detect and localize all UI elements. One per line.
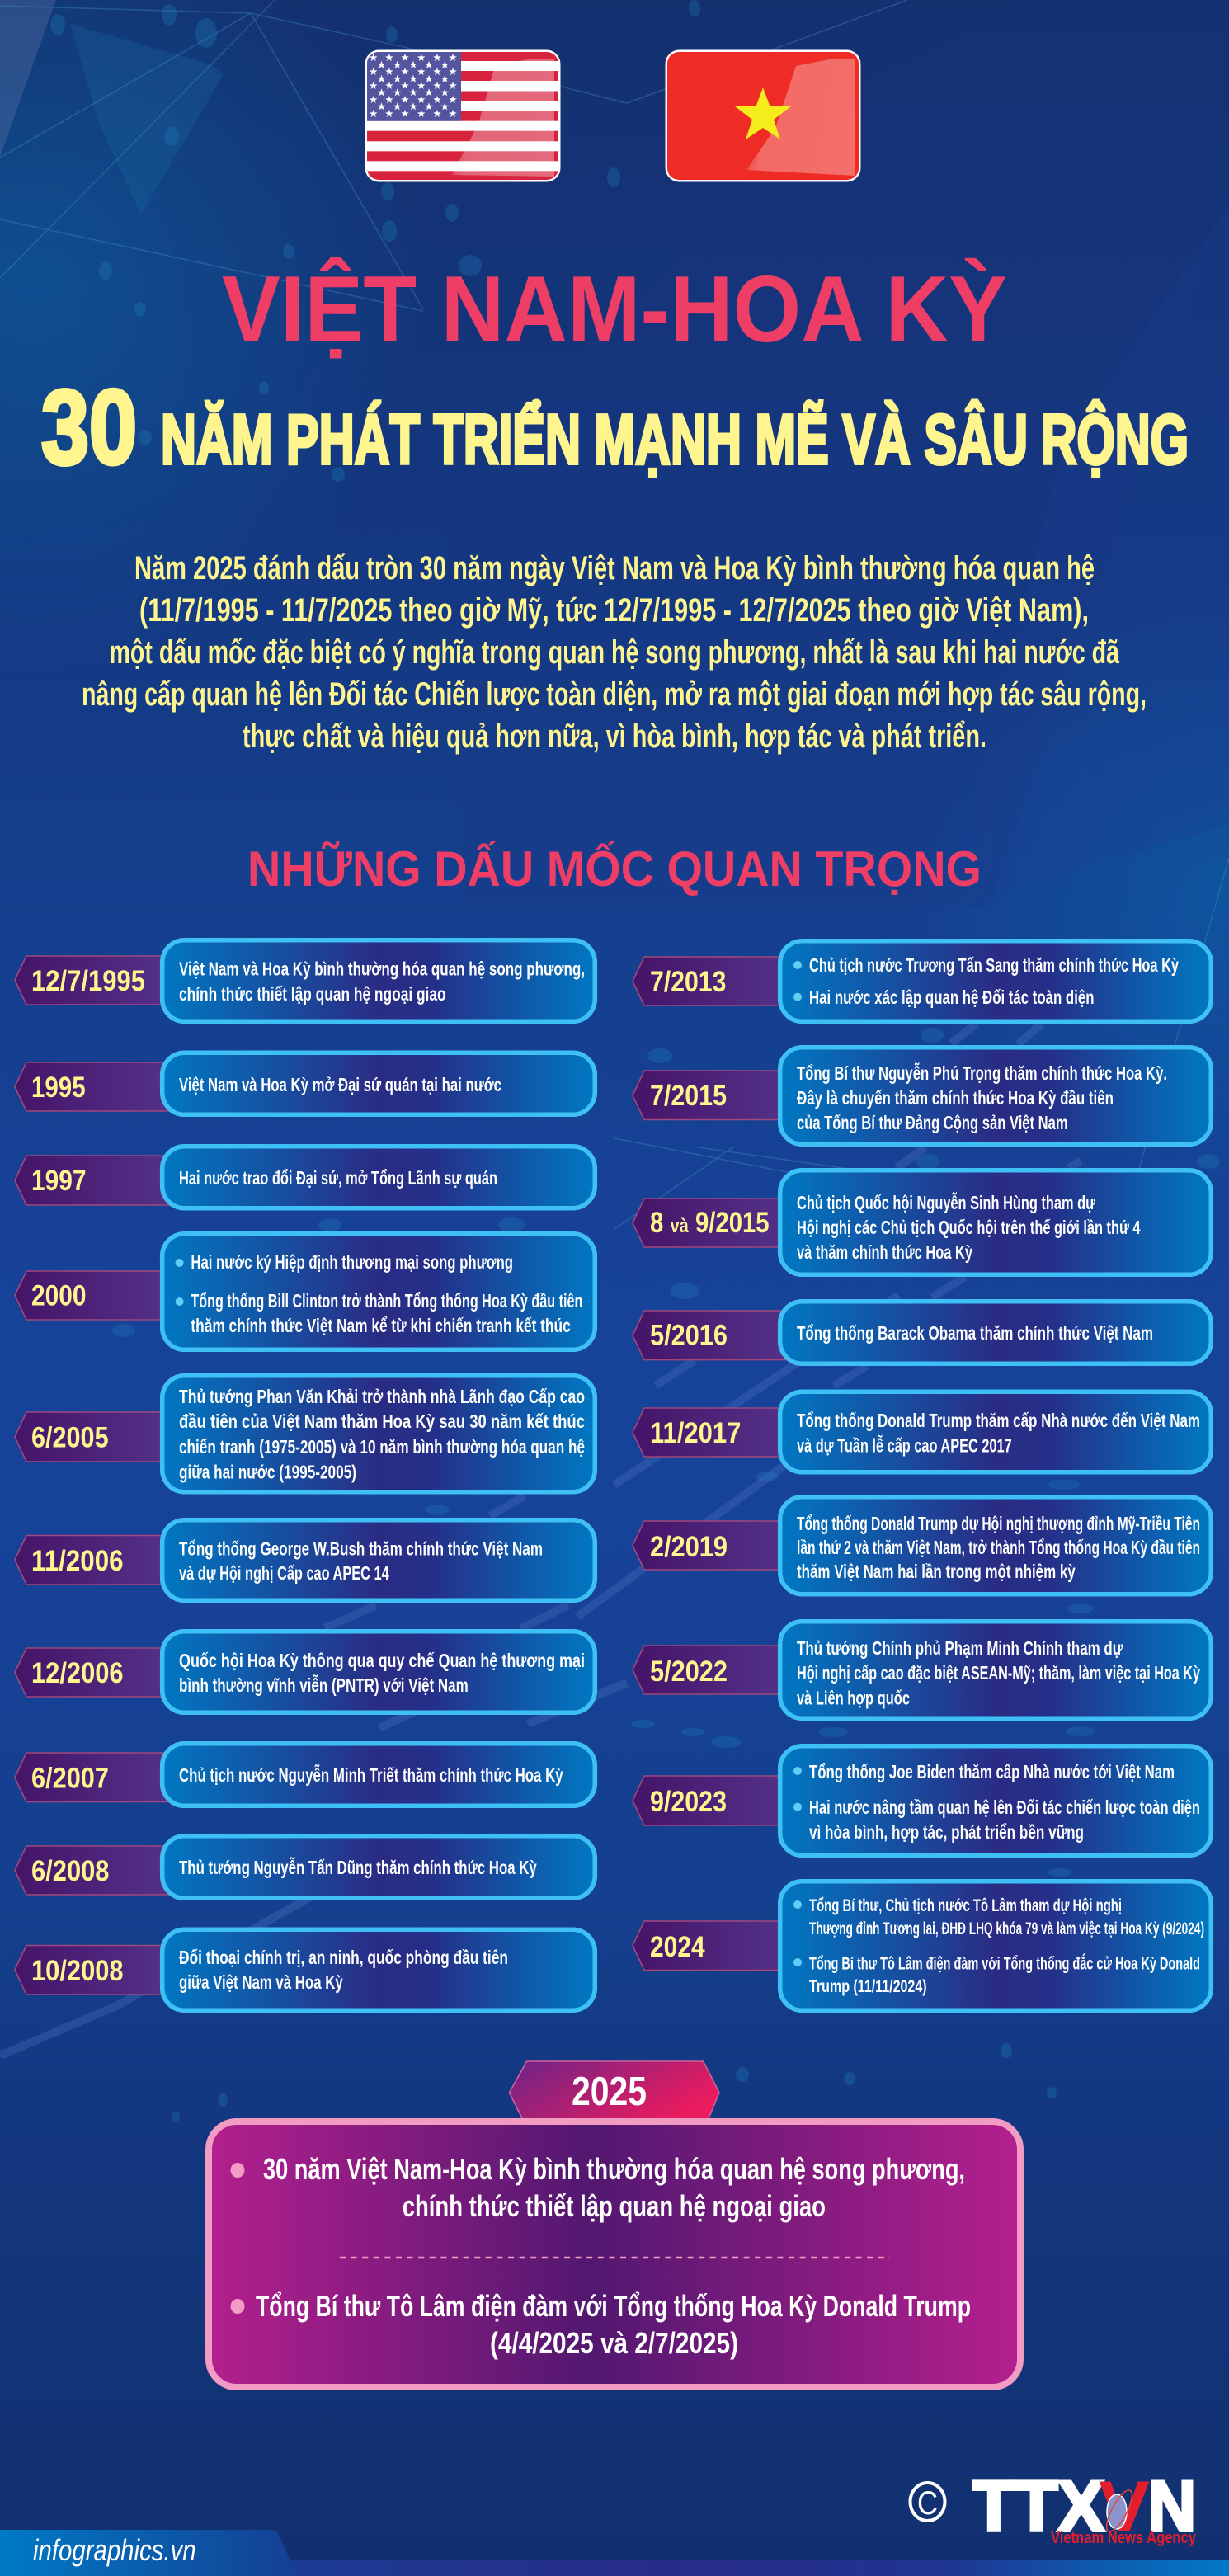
milestone 8 và 9/2015: Chủ tịch Quốc hội Nguyễn Sinh Hùng tham dự <box>797 1191 1095 1213</box>
title: VIỆT NAM-HOA KỲ <box>222 257 1007 362</box>
milestone 10/2008: giữa Việt Nam và Hoa Kỳ <box>179 1971 343 1993</box>
milestone 1997: Hai nước trao đổi Đại sứ, mở Tổng Lãnh sự quán <box>179 1167 497 1189</box>
milestone 6/2007 <box>15 1744 595 1806</box>
logo: TTXVN <box>972 2467 1197 2547</box>
milestone 6/2005: chiến tranh (1975-2005) và 10 năm bình thường hóa quan hệ <box>179 1436 585 1458</box>
milestone 5/2022: và Liên hợp quốc <box>797 1688 910 1709</box>
milestone 11/2017 <box>633 1392 1211 1472</box>
milestone 1997: 1997 <box>31 1165 86 1197</box>
milestone 2/2019 <box>633 1497 1211 1594</box>
milestone 11/2006 <box>15 1520 595 1600</box>
milestone 2000: thăm chính thức Việt Nam kể từ khi chiến tranh kết thúc <box>191 1315 571 1336</box>
milestone 7/2013: Hai nước xác lập quan hệ Đối tác toàn diện <box>809 987 1094 1008</box>
callout box: 30 năm Việt Nam-Hoa Kỳ bình thường hóa quan hệ song phương, <box>263 2152 965 2186</box>
subtitle <box>41 369 1189 487</box>
subtitle: 30 <box>41 369 137 487</box>
logo: TTXVN: TTX <box>972 2467 1104 2546</box>
milestone 10/2008: 10/2008 <box>31 1955 124 1987</box>
milestone 1995: Việt Nam và Hoa Kỳ mở Đại sứ quán tại hai nước <box>179 1074 501 1095</box>
icon: copyright: C <box>917 2485 938 2522</box>
milestone 10/2008: Đối thoại chính trị, an ninh, quốc phòng đầu tiên <box>179 1947 508 1968</box>
badge: 2025 <box>510 2061 719 2122</box>
callout box: (4/4/2025 và 2/7/2025) <box>490 2326 738 2360</box>
milestone 9/2023: 9/2023 <box>650 1786 727 1818</box>
milestone 5/2022 <box>633 1622 1211 1718</box>
milestone 8 và 9/2015: và thăm chính thức Hoa Kỳ <box>797 1241 972 1263</box>
milestone 12/2006 <box>15 1632 595 1712</box>
footer bar <box>0 2530 1229 2576</box>
milestone 7/2013: 7/2013 <box>650 966 726 998</box>
milestone 12/7/1995: Việt Nam và Hoa Kỳ bình thường hóa quan hệ song phương, <box>179 958 585 980</box>
milestone 5/2022: Thủ tướng Chính phủ Phạm Minh Chính tham dự <box>797 1637 1123 1659</box>
icon: United States flag <box>366 51 559 181</box>
milestone 12/7/1995 <box>15 940 595 1021</box>
logo: TTXVN: Vietnam News Agency <box>1051 2529 1197 2547</box>
milestone 2024: 2024 <box>650 1931 705 1963</box>
milestone 6/2008 <box>15 1836 595 1898</box>
milestone 6/2007: Chủ tịch nước Nguyễn Minh Triết thăm chính thức Hoa Kỳ <box>179 1764 563 1786</box>
milestone 6/2005: Thủ tướng Phan Văn Khải trở thành nhà Lãnh đạo Cấp cao <box>179 1386 585 1407</box>
milestone 6/2005: 6/2005 <box>31 1421 109 1453</box>
milestone 6/2005: đầu tiên của Việt Nam thăm Hoa Kỳ sau 30 năm kết thúc <box>179 1410 585 1432</box>
milestone 8 và 9/2015: 8 và 9/2015 <box>650 1207 770 1239</box>
milestone 11/2017: 11/2017 <box>650 1417 741 1449</box>
milestone 2/2019: thăm Việt Nam hai lần trong một nhiệm kỳ <box>797 1561 1076 1582</box>
milestone 12/2006: Quốc hội Hoa Kỳ thông qua quy chế Quan hệ thương mại <box>179 1650 585 1671</box>
milestone 12/2006: 12/2006 <box>31 1657 124 1689</box>
logo: TTXVN: N <box>1148 2467 1196 2546</box>
callout box: Tổng Bí thư Tô Lâm điện đàm với Tổng thống Hoa Kỳ Donald Trump <box>256 2289 971 2323</box>
logo: TTXVN: V <box>1099 2467 1150 2546</box>
milestone 11/2006: 11/2006 <box>31 1545 124 1577</box>
milestone 2024 <box>633 1881 1211 2010</box>
milestone 7/2015: Đây là chuyến thăm chính thức Hoa Kỳ đầu tiên <box>797 1087 1114 1109</box>
milestone 11/2017: và dự Tuần lễ cấp cao APEC 2017 <box>797 1434 1012 1457</box>
milestone 10/2008 <box>15 1929 595 2010</box>
milestone 2000: Tổng thống Bill Clinton trở thành Tổng thống Hoa Kỳ đầu tiên <box>191 1290 582 1312</box>
milestone 12/7/1995: 12/7/1995 <box>31 965 145 997</box>
milestone 1997 <box>15 1147 595 1208</box>
panel: right timeline column <box>633 941 1211 2010</box>
milestone 6/2008: 6/2008 <box>31 1855 109 1887</box>
milestone 6/2005: giữa hai nước (1995-2005) <box>179 1462 356 1483</box>
heading: milestones: NHỮNG DẤU MỐC QUAN TRỌNG <box>247 841 982 897</box>
milestone 12/2006: bình thường vĩnh viễn (PNTR) với Việt Nam <box>179 1674 469 1696</box>
milestone 2000 <box>15 1234 595 1349</box>
milestone 9/2023 <box>633 1746 1211 1855</box>
milestone 2/2019: 2/2019 <box>650 1531 728 1563</box>
milestone 8 và 9/2015 <box>633 1170 1211 1274</box>
panel: left timeline column <box>15 940 595 2010</box>
milestone 5/2016 <box>633 1302 1211 1363</box>
milestone 1995: 1995 <box>31 1071 86 1104</box>
milestone 6/2008: Thủ tướng Nguyễn Tấn Dũng thăm chính thức Hoa Kỳ <box>179 1856 537 1878</box>
milestone 1995 <box>15 1053 595 1114</box>
milestone 5/2022: 5/2022 <box>650 1655 728 1688</box>
milestone 11/2006: và dự Hội nghị Cấp cao APEC 14 <box>179 1562 389 1584</box>
intro text block <box>82 550 1147 755</box>
milestone 7/2013 <box>633 941 1211 1021</box>
milestone 7/2015: 7/2015 <box>650 1080 727 1112</box>
milestone 11/2006: Tổng thống George W.Bush thăm chính thức Việt Nam <box>179 1538 543 1559</box>
icon: Vietnam flag <box>666 51 859 181</box>
milestone 2000: 2000 <box>31 1280 86 1312</box>
milestone 6/2005 <box>15 1376 595 1492</box>
milestone 2000: Hai nước ký Hiệp định thương mại song phương <box>191 1251 513 1273</box>
callout box <box>209 2122 1020 2387</box>
icon: copyright <box>911 2483 945 2522</box>
milestone 9/2023: vì hòa bình, hợp tác, phát triển bền vững <box>809 1821 1084 1843</box>
milestone 12/7/1995: chính thức thiết lập quan hệ ngoại giao <box>179 983 446 1005</box>
milestone 7/2015: của Tổng Bí thư Đảng Cộng sản Việt Nam <box>797 1112 1068 1133</box>
badge: 2025: 2025 <box>572 2070 647 2114</box>
milestone 6/2007: 6/2007 <box>31 1763 109 1795</box>
callout box: chính thức thiết lập quan hệ ngoại giao <box>403 2189 826 2223</box>
milestone 2024: Trump (11/11/2024) <box>809 1977 927 1996</box>
milestone 5/2016: 5/2016 <box>650 1320 728 1352</box>
source: infographics.vn: infographics.vn <box>33 2533 196 2567</box>
milestone 7/2015 <box>633 1048 1211 1144</box>
panel: 2025 <box>209 2061 1020 2387</box>
